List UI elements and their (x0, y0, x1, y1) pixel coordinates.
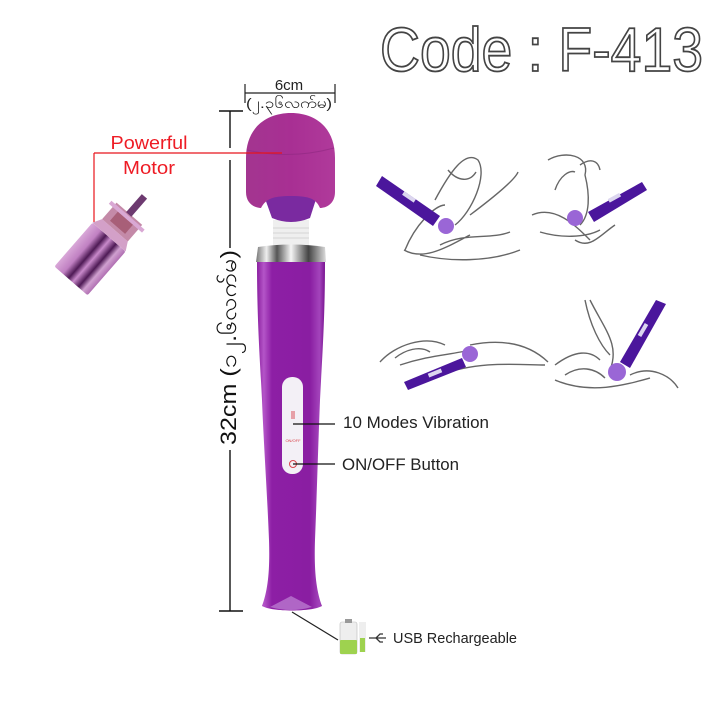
usage illustration: top right (532, 155, 647, 243)
white neck (273, 220, 309, 246)
usage illustration: bottom left (380, 341, 548, 390)
icon: battery (340, 619, 366, 654)
mode icon and on/off label: ON/OFF (285, 438, 301, 443)
callout: powerful motor (94, 133, 282, 222)
chrome band (256, 244, 326, 262)
width dimension: 6cm (245, 77, 335, 114)
icon: motor (54, 182, 161, 295)
callout: usb rechargeable: USB Rechargeable (393, 630, 517, 647)
height dimension: 32cm (216, 111, 246, 611)
icon: usb (369, 634, 386, 642)
usage illustration: bottom right (555, 300, 678, 388)
silicone head (246, 113, 335, 208)
callout: powerful motor: Motor (123, 158, 175, 178)
callout: powerful motor: Powerful (110, 133, 188, 153)
callout: on/off button: ON/OFF Button (342, 456, 459, 474)
callout: usb rechargeable (292, 612, 517, 654)
control panel (282, 377, 303, 474)
width dimension: 6cm: (၂.၃၆လက်မ) (246, 95, 332, 114)
product: massager wand (246, 113, 335, 610)
collar (263, 193, 318, 222)
width dimension: 6cm: 6cm (275, 77, 303, 94)
height dimension: 32cm: 32cm (၁၂.၆လက်မ) (216, 250, 246, 445)
callout: 10 modes vibration: 10 Modes Vibration (343, 414, 489, 432)
wand body (257, 262, 325, 610)
wand base highlight (270, 596, 312, 610)
usage illustration: top left (376, 158, 520, 260)
mode icon and on/off label (285, 411, 301, 468)
